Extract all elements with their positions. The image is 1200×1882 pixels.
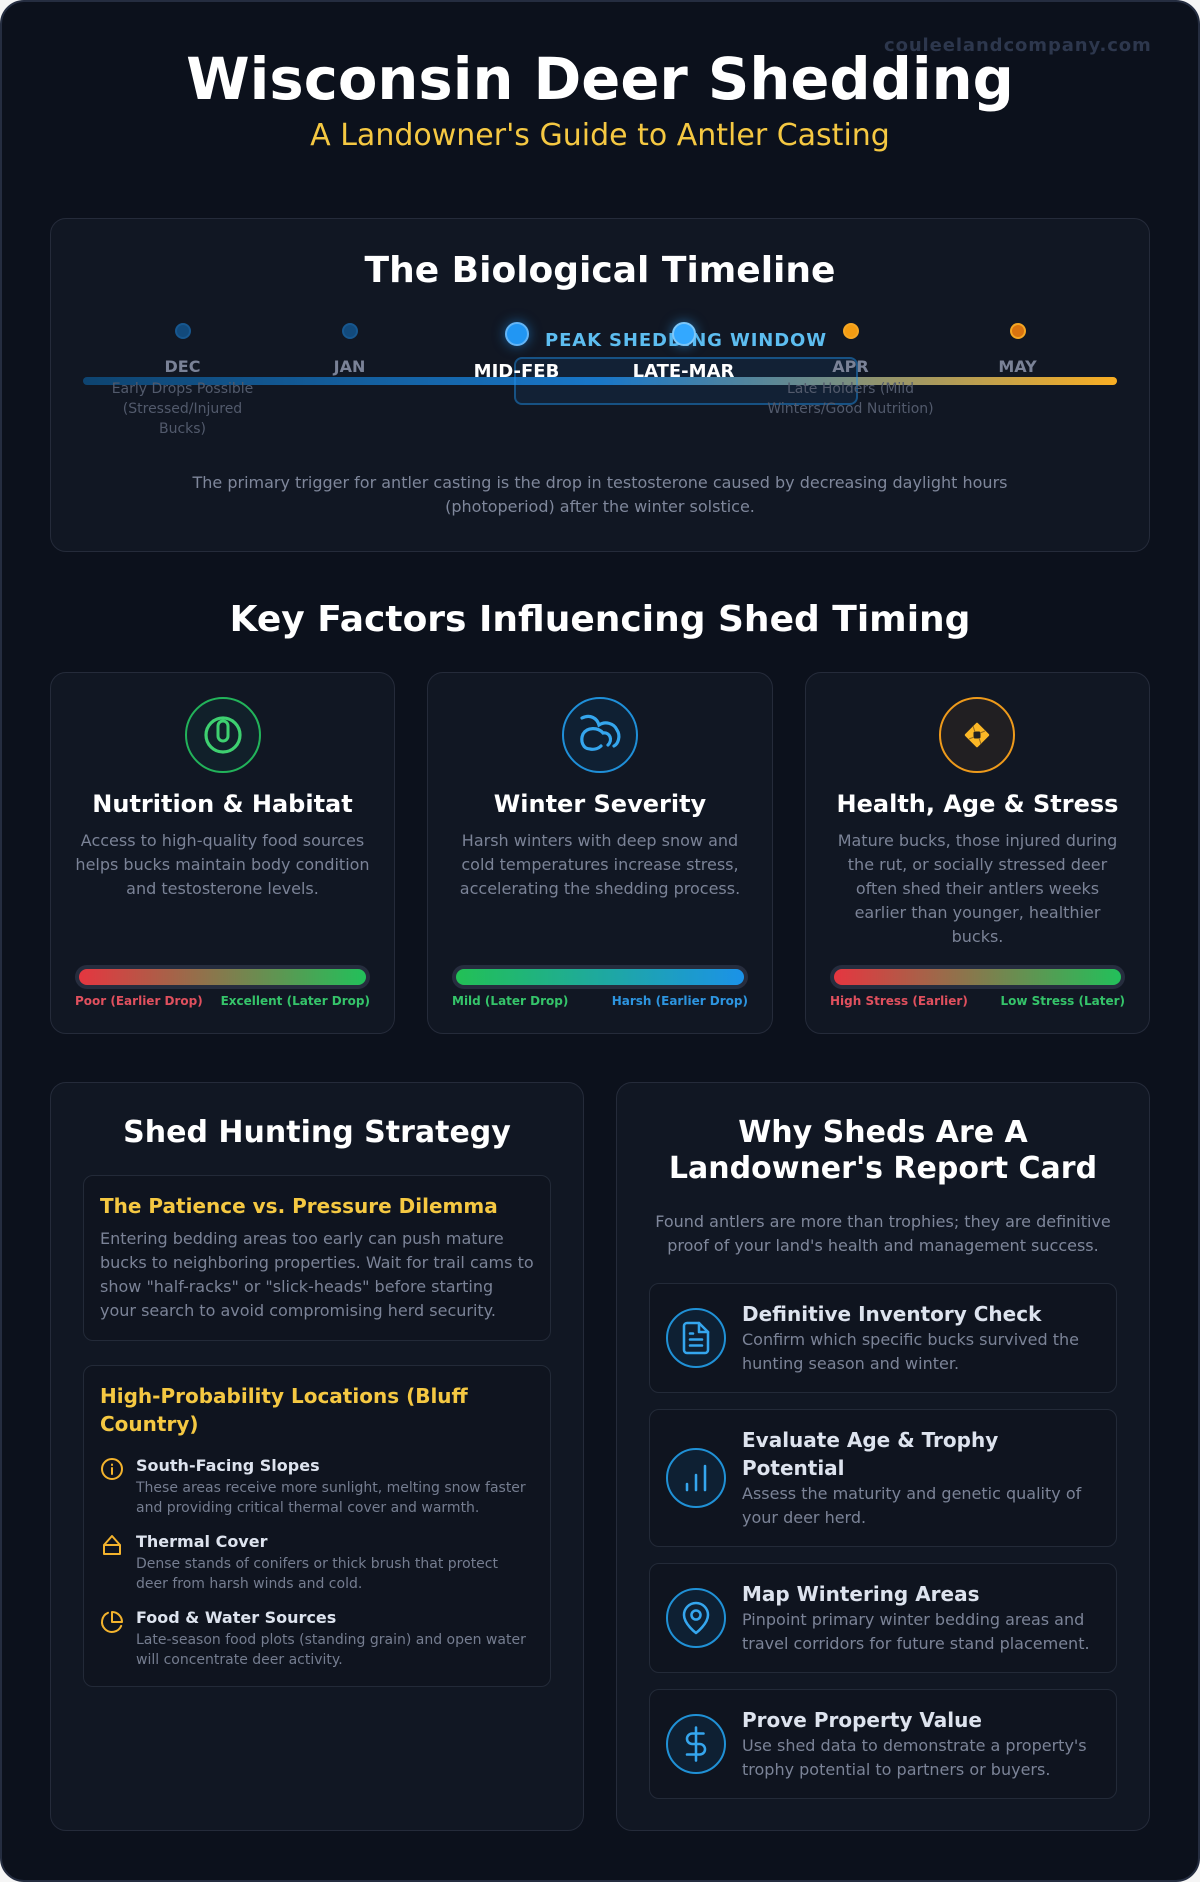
report item: property value (649, 1689, 1117, 1799)
item text (136, 1556, 498, 1592)
subtitle: A Landowner's Guide to Antler Casting (310, 118, 890, 153)
panel: shed hunting strategy (50, 1082, 584, 1831)
icon: dollar (666, 1714, 726, 1774)
icon: health (939, 697, 1015, 773)
item text: These areas receive more sunlight, melting snow faster (136, 1480, 526, 1496)
item title: Definitive Inventory Check (742, 1302, 1041, 1326)
marker: December (112, 323, 253, 437)
item text: hunting season and winter. (742, 1354, 959, 1373)
section heading: key factors: Key Factors Influencing Shed Timing (230, 599, 970, 640)
item text (742, 1484, 1082, 1527)
peak shedding window label: PEAK SHEDDING WINDOW (545, 330, 827, 351)
note: late holders: Winters/Good Nutrition) (767, 401, 934, 417)
card description: the rut, or socially stressed deer (848, 855, 1107, 874)
note: early drops: (Stressed/Injured (123, 401, 242, 417)
panel heading: Why Sheds Are A (738, 1115, 1028, 1150)
item text: your deer herd. (742, 1508, 866, 1527)
scale label: mild: Mild (Later Drop) (452, 994, 568, 1008)
card description: Access to high-quality food sources (81, 831, 364, 850)
note: early drops: Bucks) (159, 421, 206, 437)
item text: Assess the maturity and genetic quality of (742, 1484, 1081, 1503)
card description: Mature bucks, those injured during (838, 831, 1117, 850)
icon: document (666, 1308, 726, 1368)
watermark: couleelandcompany.com (884, 35, 1152, 56)
panel: nutrition and habitat (50, 672, 395, 1034)
dot: January (342, 323, 358, 339)
item text: deer from harsh winds and cold. (136, 1576, 362, 1592)
box heading (100, 1384, 468, 1436)
card title: Winter Severity (494, 790, 706, 818)
box: high-probability locations (83, 1365, 551, 1687)
card description: helps bucks maintain body condition (75, 855, 370, 874)
scale label: harsh: Harsh (Earlier Drop) (612, 994, 748, 1008)
item text: and providing critical thermal cover and warmth. (136, 1500, 479, 1516)
item text (742, 1736, 1087, 1779)
label: MAY: MAY (998, 357, 1037, 376)
panel intro: Found antlers are more than trophies; they are definitive (655, 1212, 1111, 1231)
card description (460, 831, 740, 898)
item title: Food & Water Sources (136, 1608, 336, 1627)
note: early drops (112, 381, 253, 437)
card title: Health, Age & Stress (837, 790, 1118, 818)
dot: December (175, 323, 191, 339)
icon: nutrition (185, 697, 261, 773)
item text: trophy potential to partners or buyers. (742, 1760, 1050, 1779)
card description: accelerating the shedding process. (460, 879, 740, 898)
item text (136, 1632, 526, 1668)
panel: health age and stress (805, 672, 1150, 1034)
item text: Confirm which specific bucks survived the (742, 1330, 1079, 1349)
scale: nutrition (75, 965, 370, 989)
card description: cold temperatures increase stress, (461, 855, 739, 874)
panel heading: Landowner's Report Card (669, 1151, 1097, 1186)
scale label: poor: Poor (Earlier Drop) (75, 994, 203, 1008)
timeline bar (83, 377, 1117, 385)
item text (742, 1610, 1090, 1653)
dot: Mid-February (505, 322, 529, 346)
scale label: high stress: High Stress (Earlier) (830, 994, 968, 1008)
item text: Late-season food plots (standing grain) and open water (136, 1632, 526, 1648)
timeline explanation: The primary trigger for antler casting is the drop in testosterone caused by decreasing daylight hours (192, 473, 1007, 492)
note: late holders: Late Holders (Mild (787, 381, 914, 397)
icon: winter cloud (562, 697, 638, 773)
marker: Mid-February (474, 315, 559, 382)
box heading: The Patience vs. Pressure Dilemma (100, 1194, 498, 1218)
report item: age and trophy (649, 1409, 1117, 1547)
card description: Harsh winters with deep snow and (462, 831, 738, 850)
title: Wisconsin Deer Shedding (186, 46, 1014, 113)
card description (75, 831, 370, 898)
box text: your search to avoid compromising herd security. (100, 1301, 496, 1320)
item text: Dense stands of conifers or thick brush that protect (136, 1556, 498, 1572)
marker: Late-March (633, 315, 734, 382)
card description (838, 831, 1117, 946)
item text: will concentrate deer activity. (136, 1652, 343, 1668)
item title: South-Facing Slopes (136, 1456, 320, 1475)
dot: April (843, 323, 859, 339)
scale: stress (830, 965, 1125, 989)
card description: often shed their antlers weeks (856, 879, 1099, 898)
item text (742, 1330, 1079, 1373)
note: late holders (767, 381, 934, 417)
box: patience vs pressure (83, 1175, 551, 1341)
box heading: High-Probability Locations (Bluff (100, 1384, 468, 1408)
icon: house (103, 1535, 121, 1555)
report item: inventory (649, 1283, 1117, 1393)
label: APR: APR (832, 357, 869, 376)
card description: bucks. (952, 927, 1003, 946)
box text: bucks to neighboring properties. Wait for trail cams to (100, 1253, 534, 1272)
label: MID-FEB: MID-FEB (474, 361, 559, 382)
card description: and testosterone levels. (126, 879, 319, 898)
card description: earlier than younger, healthier (855, 903, 1100, 922)
item text (136, 1480, 526, 1516)
report item: wintering areas (649, 1563, 1117, 1673)
scale label: low stress: Low Stress (Later) (1000, 994, 1125, 1008)
dot: May (1010, 323, 1026, 339)
panel: winter severity (427, 672, 773, 1034)
item title: Prove Property Value (742, 1708, 982, 1732)
item text: Pinpoint primary winter bedding areas and (742, 1610, 1084, 1629)
note: early drops: Early Drops Possible (112, 381, 253, 397)
timeline heading: The Biological Timeline (365, 250, 835, 291)
timeline explanation (192, 473, 1007, 516)
box text (100, 1229, 534, 1320)
peak shedding window box (514, 357, 858, 405)
icon: info circle (101, 1458, 123, 1480)
marker: May (998, 323, 1037, 376)
label: LATE-MAR: LATE-MAR (633, 361, 734, 382)
icon: bar chart (666, 1448, 726, 1508)
location: south-facing slopes (101, 1456, 526, 1516)
item title: Thermal Cover (136, 1532, 267, 1551)
panel intro (655, 1212, 1111, 1255)
scale label: excellent: Excellent (Later Drop) (221, 994, 370, 1008)
timeline explanation: (photoperiod) after the winter solstice. (445, 497, 755, 516)
panel: biological timeline (50, 218, 1150, 552)
location: food and water (101, 1608, 526, 1668)
panel intro: proof of your land's health and management success. (667, 1236, 1099, 1255)
item text: travel corridors for future stand placement. (742, 1634, 1090, 1653)
icon: pie chart (101, 1611, 123, 1633)
item title: Map Wintering Areas (742, 1582, 980, 1606)
item text: Use shed data to demonstrate a property's (742, 1736, 1087, 1755)
box text: Entering bedding areas too early can push mature (100, 1229, 504, 1248)
scale: winter (452, 965, 748, 989)
item title: Potential (742, 1456, 845, 1480)
label: JAN: JAN (334, 357, 365, 376)
panel heading: Shed Hunting Strategy (123, 1115, 511, 1150)
panel heading (669, 1115, 1097, 1186)
panel: landowner's report card (616, 1082, 1150, 1831)
icon: map pin (666, 1588, 726, 1648)
card title: Nutrition & Habitat (92, 790, 353, 818)
box text: show "half-racks" or "slick-heads" before starting (100, 1277, 493, 1296)
marker: April (767, 323, 934, 417)
marker: January (332, 323, 365, 376)
box heading: Country) (100, 1412, 198, 1436)
label: DEC: DEC (165, 357, 200, 376)
location: thermal cover (103, 1532, 498, 1592)
dot: Late-March (672, 322, 696, 346)
item title: Evaluate Age & Trophy (742, 1428, 998, 1452)
item title (742, 1428, 998, 1480)
